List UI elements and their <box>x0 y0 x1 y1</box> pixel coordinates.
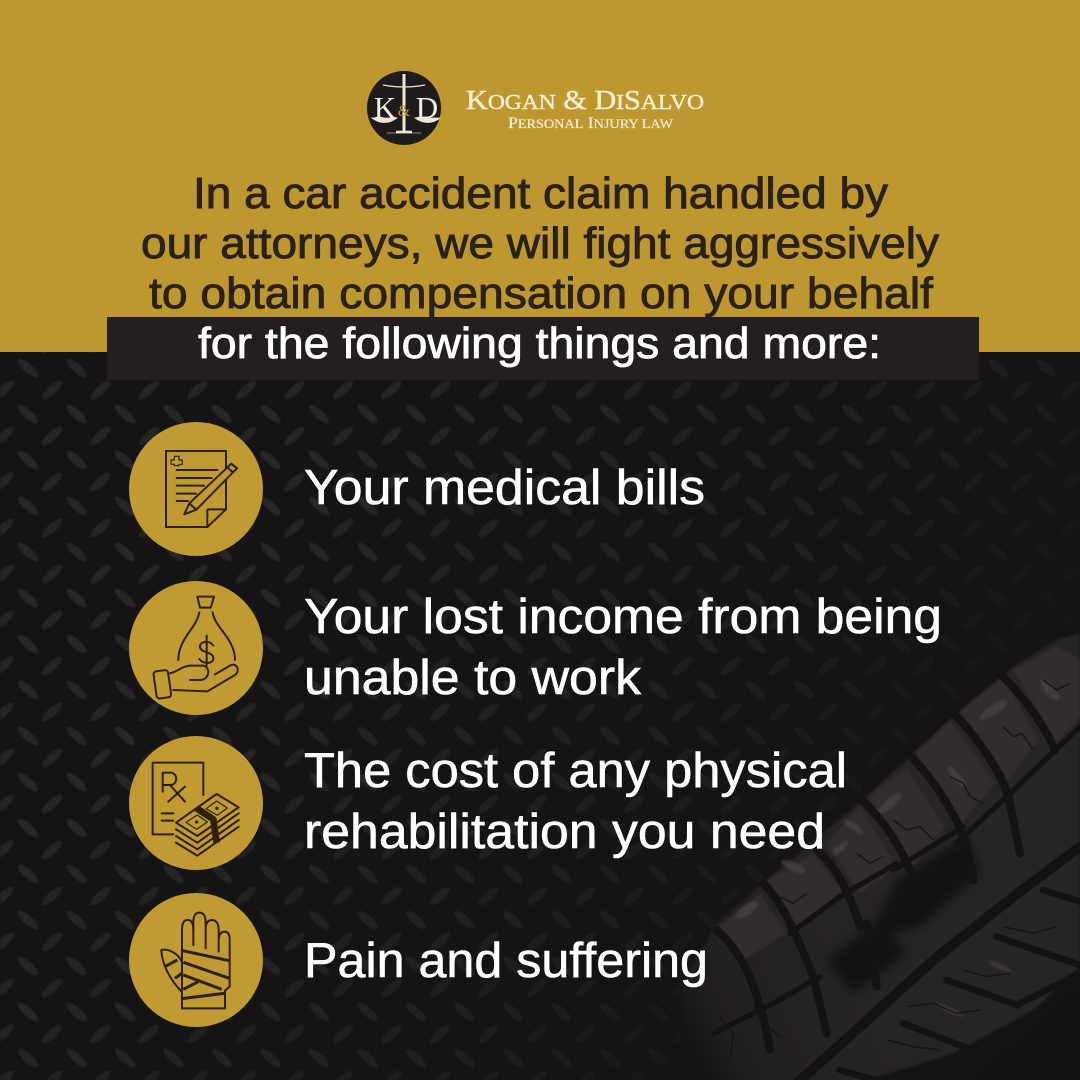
heading text: In a car accident claim handled by <box>193 169 888 218</box>
dark worn patches <box>827 837 1080 1080</box>
heading text: for the following things and more: <box>198 319 881 368</box>
heading band <box>107 317 979 380</box>
label: rehabilitation you need <box>304 805 825 859</box>
heading text: our attorneys, we will fight aggressively <box>141 219 939 268</box>
heading text <box>141 169 939 368</box>
label <box>304 744 847 859</box>
label: The cost of any physical <box>304 744 847 798</box>
tire tread band <box>680 633 1080 1080</box>
logo emblem: K and D scales: K <box>374 90 397 125</box>
background: tire track <box>680 633 1080 1080</box>
dark grooves <box>713 673 1080 1080</box>
icon: bandaged hand <box>129 893 263 1027</box>
icon: prescription and cash stack <box>129 736 263 870</box>
label: Your lost income from being <box>304 590 942 644</box>
central tire groove <box>793 847 1080 1080</box>
logo emblem: K and D scales: D <box>416 90 438 125</box>
logo tagline: PERSONAL INJURY LAW <box>508 115 674 132</box>
item: medical bills <box>129 422 705 556</box>
highlights on tread <box>733 677 1062 1018</box>
item: rehabilitation <box>129 736 847 870</box>
label: unable to work <box>304 651 642 705</box>
icon: medical document with pencil <box>129 422 263 556</box>
icon: money bag over hand <box>129 581 263 715</box>
logo emblem: K and D scales: & <box>398 103 411 120</box>
label <box>304 590 942 705</box>
item: lost income <box>129 581 942 715</box>
logo emblem: K and D scales <box>367 71 441 145</box>
lighter upper tread blocks <box>718 647 1080 960</box>
top gold panel <box>0 0 1080 352</box>
thin tread cracks <box>720 680 1070 1060</box>
item: pain and suffering <box>129 893 708 1027</box>
logo <box>367 71 704 145</box>
logo wordmark: KOGAN & D ISALVO <box>466 85 704 115</box>
heading text: to obtain compensation on your behalf <box>149 269 934 318</box>
label: Pain and suffering <box>304 934 708 988</box>
label: Your medical bills <box>304 461 705 515</box>
background: dark diamond plate <box>0 352 1044 1080</box>
